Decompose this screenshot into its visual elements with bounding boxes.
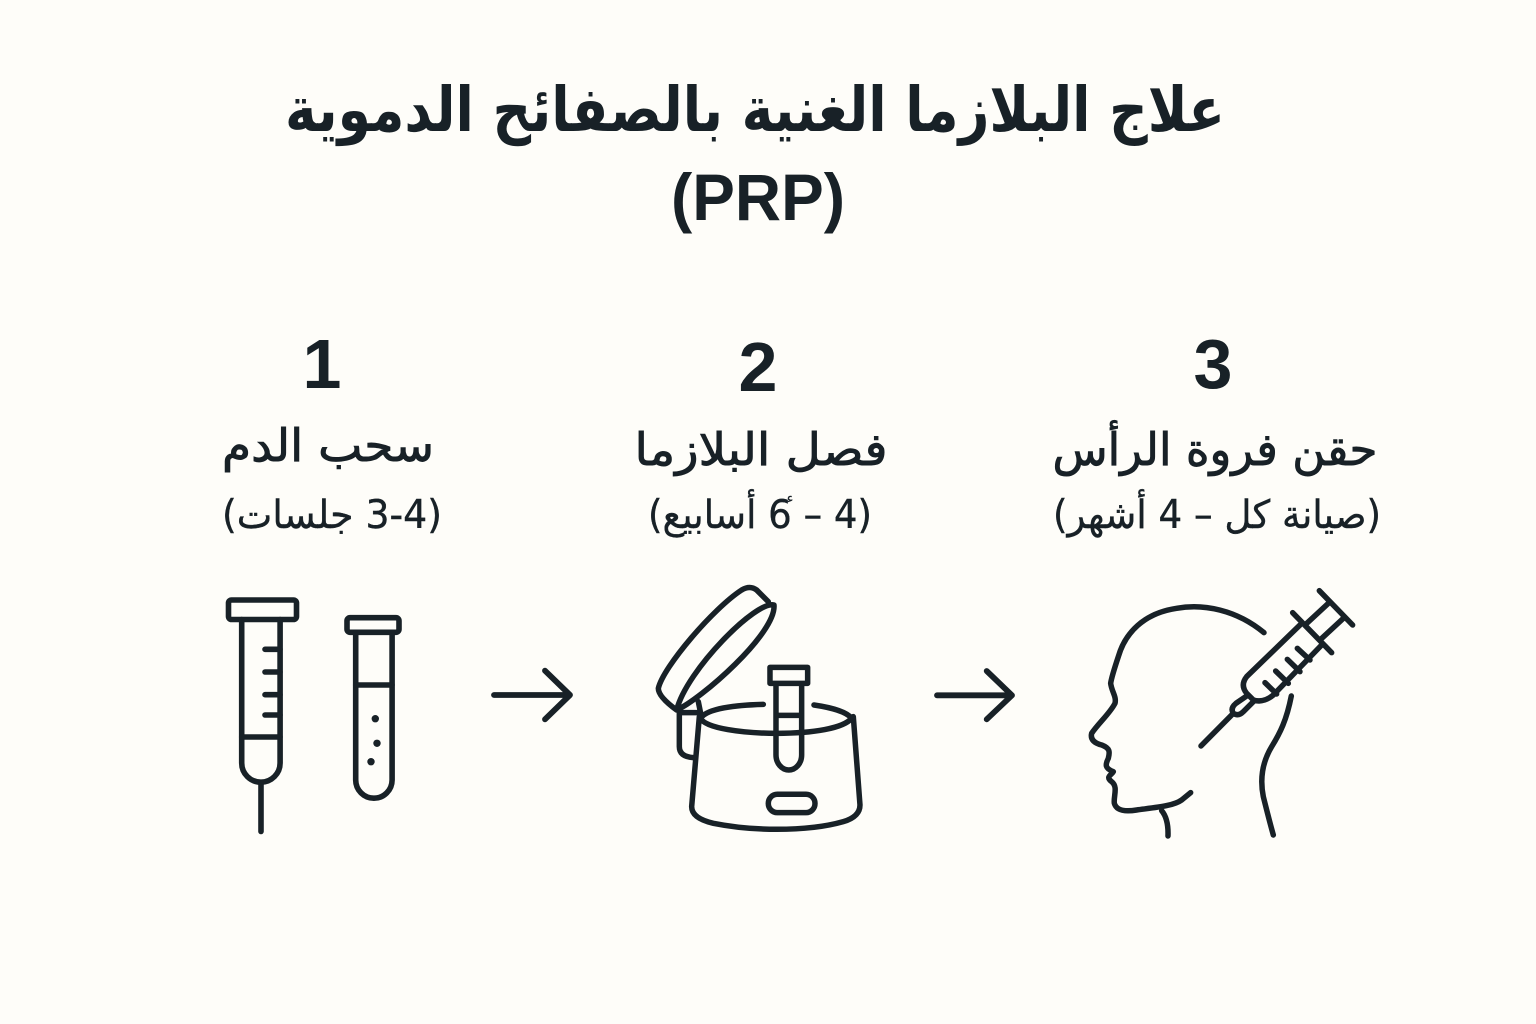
step 2 heading: (4 – 6 أسابيع)	[648, 489, 872, 538]
icon: blood tube	[347, 618, 399, 798]
step 1 heading: (3-4 جلسات)	[222, 493, 442, 538]
centrifuge handle	[768, 794, 815, 813]
step 2 heading: ء	[786, 489, 794, 507]
icon: syringe	[228, 600, 296, 832]
title: علاج البلازما الغنية بالصفائح الدموية	[285, 73, 1225, 146]
centrifuge tube	[770, 667, 808, 770]
syringe	[1201, 591, 1353, 746]
neck	[1162, 696, 1291, 836]
step 2 heading	[634, 328, 888, 538]
step 2 heading: 2	[739, 328, 777, 406]
title: (PRP)	[671, 160, 845, 234]
centrifuge lid	[658, 587, 774, 710]
step 2 heading: فصل البلازما	[634, 423, 888, 476]
step 3 heading	[1052, 325, 1381, 538]
arrow: step 1 to step 2	[494, 671, 570, 719]
step 3 heading: حقن فروة الرأس	[1052, 420, 1378, 477]
step 1 heading	[222, 325, 442, 538]
arrow: step 2 to step 3	[937, 671, 1012, 719]
centrifuge rim	[701, 704, 852, 733]
title	[285, 73, 1225, 234]
step 3 heading: 3	[1194, 325, 1232, 403]
centrifuge body	[692, 717, 860, 829]
icon: head with syringe	[1091, 591, 1353, 836]
step 3 heading: (صيانة كل – 4 أشهر)	[1053, 489, 1381, 538]
head profile	[1091, 607, 1264, 811]
centrifuge hinge	[679, 702, 701, 758]
step 1 heading: سحب الدم	[222, 419, 434, 472]
icon: centrifuge	[658, 587, 860, 829]
step 1 heading: 1	[303, 325, 341, 403]
